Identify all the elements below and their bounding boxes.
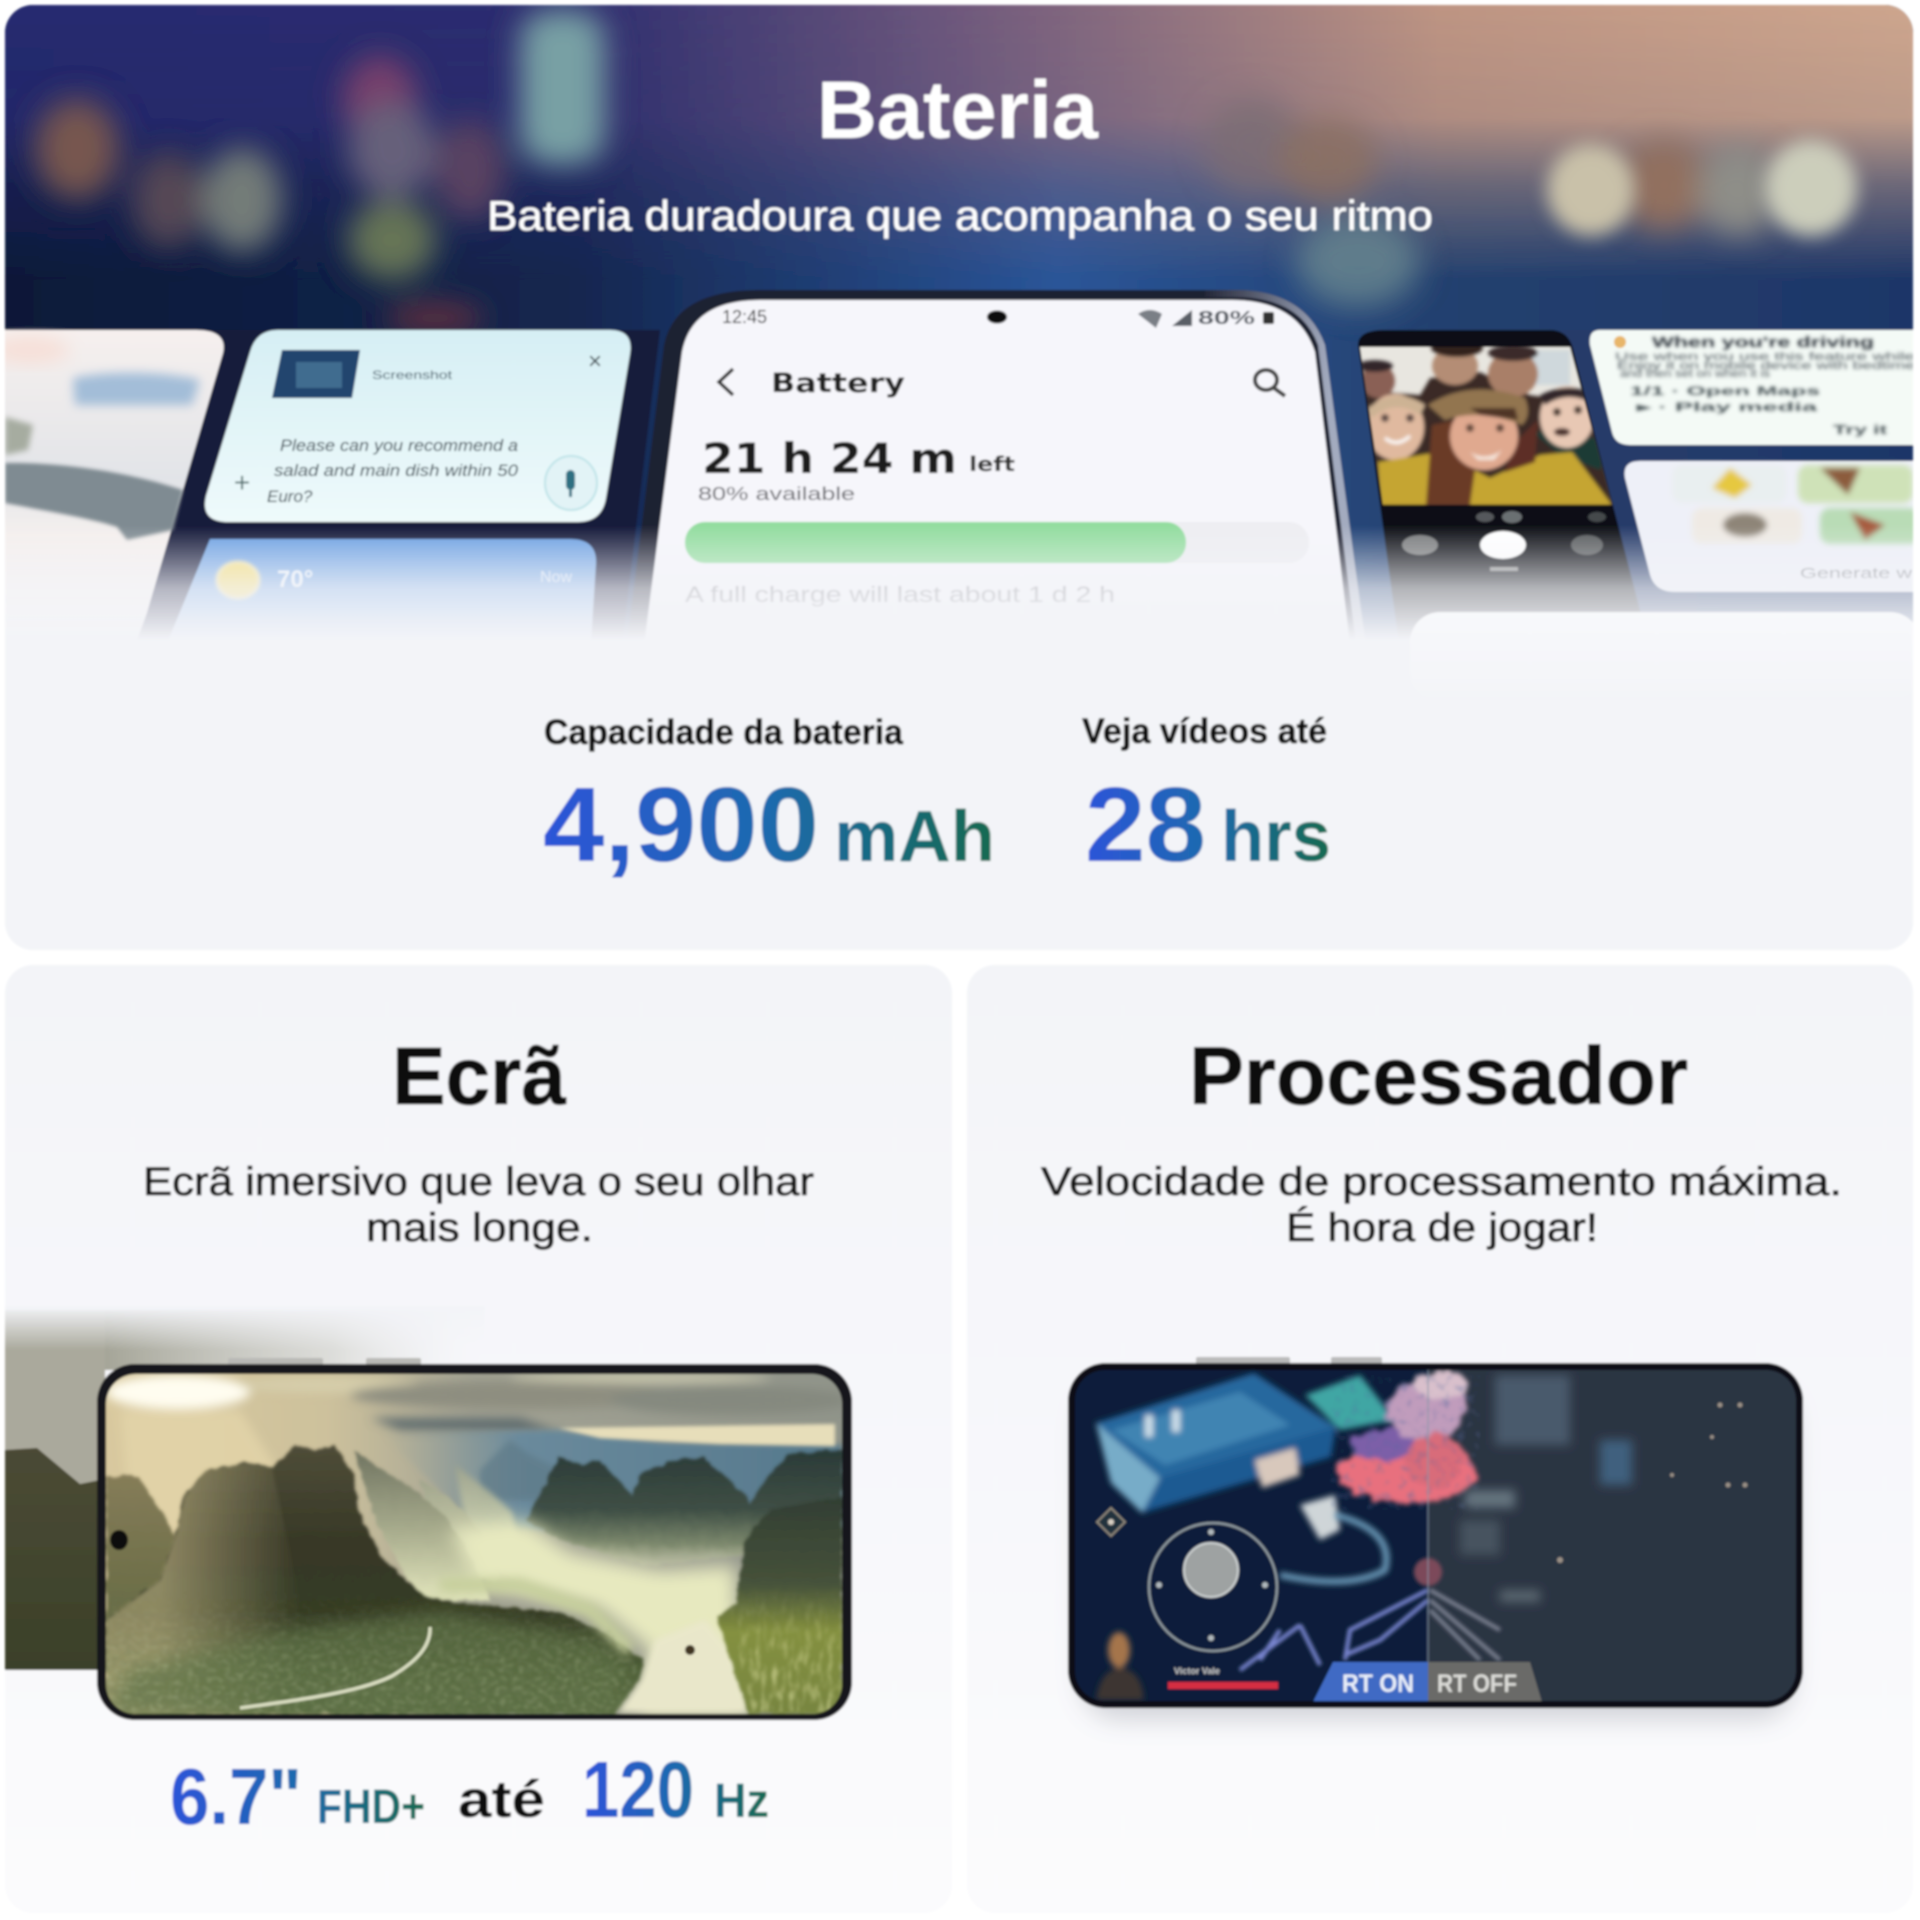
description <box>1041 1160 1842 1250</box>
fog valley <box>450 1520 750 1714</box>
phone: landscape screen <box>97 1358 852 1720</box>
status bar: 80% <box>1198 308 1255 328</box>
back chevron <box>719 369 733 395</box>
header photo background with bokeh <box>3 3 1915 735</box>
image thumbnails <box>1672 465 1920 544</box>
heading: Ecrã: Ecrã <box>392 1031 566 1122</box>
foliage texture <box>106 1590 640 1712</box>
description: Ecrã imersivo que leva o seu olhar <box>143 1160 814 1204</box>
subtitle: Bateria duradoura que acompanha o seu ritmo <box>487 192 1433 239</box>
description: Velocidade de processamento máxima. <box>1041 1160 1842 1204</box>
heading: Bateria: Bateria <box>817 65 1099 156</box>
description: mais longe. <box>366 1206 593 1250</box>
spec line: 120 <box>582 1745 694 1834</box>
RT ON label <box>1313 1662 1428 1702</box>
landscape image <box>100 1370 850 1720</box>
phone screen: 80% available <box>698 484 855 504</box>
lit ridge rim <box>440 1585 630 1650</box>
panel: display <box>5 965 952 1913</box>
airplane wing <box>5 463 183 540</box>
card: weather: Now <box>540 569 572 586</box>
card: driving tip: 1/1 · Open Maps <box>1630 384 1821 398</box>
spec line: 6.7" <box>170 1752 302 1841</box>
card: assistant prompt: + <box>234 467 250 498</box>
battery heading: Battery <box>771 368 905 399</box>
health bar <box>1168 1666 1278 1689</box>
card: assistant prompt: × <box>588 348 602 375</box>
card: driving tip: Try it <box>1833 422 1888 437</box>
card: driving tip <box>1590 330 1920 445</box>
card: airplane photo <box>0 330 224 660</box>
status bar <box>722 307 1274 328</box>
RT ON structure <box>1096 1373 1395 1540</box>
distant blue mountains <box>380 1430 842 1530</box>
camera hole <box>110 1530 128 1550</box>
left low hill <box>106 1476 178 1714</box>
creature legs <box>1240 1590 1428 1670</box>
thumbnail <box>272 350 360 398</box>
card: generated images <box>1625 461 1920 592</box>
landscape photo behind phone <box>5 1306 485 1670</box>
misty ridges <box>420 1480 500 1580</box>
mic button <box>545 456 597 510</box>
selfie photo <box>1355 339 1617 510</box>
card: weather <box>174 537 598 632</box>
card: driving tip: Use when you use this feature while <box>1615 351 1915 363</box>
stat: battery capacity <box>543 713 995 884</box>
main phone <box>625 290 1368 660</box>
faint far ridge <box>455 1465 520 1550</box>
card: driving tip: and then set on when it is <box>1620 368 1771 380</box>
spec line <box>170 1745 769 1841</box>
panel: processor <box>967 965 1913 1913</box>
right dark mountains <box>526 1450 842 1568</box>
phone screen <box>642 300 1352 660</box>
RT OFF label <box>1428 1662 1542 1702</box>
right hill <box>717 1497 842 1714</box>
description: É hora de jogar! <box>1286 1205 1598 1250</box>
card: assistant prompt: Please can you recommend a <box>280 436 518 455</box>
RT ON label: RT ON <box>1342 1670 1414 1698</box>
card: generated images: Generate w <box>1800 565 1912 582</box>
status bar: 12:45 <box>722 307 767 327</box>
clouds and sun glow <box>106 1373 850 1560</box>
battery level bar <box>685 522 1309 563</box>
heading: Processador: Processador <box>1189 1031 1688 1122</box>
spec line: até <box>458 1771 545 1829</box>
time left: 21 h 24 m <box>702 434 957 483</box>
RT OFF structures <box>1460 1375 1632 1602</box>
phone: game screen <box>1068 1357 1803 1720</box>
spec line: FHD+ <box>317 1781 425 1834</box>
card: assistant prompt: Euro? <box>267 487 313 506</box>
card: driving tip: ▸ · Play media <box>1635 400 1818 414</box>
card: driving tip: When you're driving <box>1652 334 1874 351</box>
stat: video playback: 28 <box>1085 766 1206 884</box>
target icon <box>1097 1508 1125 1536</box>
search icon <box>1255 370 1285 396</box>
neon foliage <box>1337 1371 1477 1503</box>
phone screen: A full charge will last about 1 d 2 h <box>685 582 1115 607</box>
main mountain <box>106 1445 643 1714</box>
card: assistant prompt: salad and main dish within 50 <box>274 461 519 480</box>
selfie phone <box>1355 330 1650 650</box>
health bar: Victor Vale <box>1174 1666 1220 1676</box>
card: assistant prompt: Screenshot <box>372 368 453 382</box>
stat: video playback <box>1082 712 1331 884</box>
card: driving tip: Enjoy it on mobile device with bedtime <box>1617 360 1915 372</box>
RT OFF label: RT OFF <box>1437 1670 1517 1698</box>
stat: video playback: hrs <box>1221 797 1331 877</box>
fade of header into panel <box>0 525 1920 640</box>
description <box>143 1160 814 1250</box>
dark rear phone body <box>176 328 660 590</box>
card: weather: 70° <box>277 566 313 593</box>
stat: battery capacity: Capacidade da bateria <box>544 713 904 752</box>
panel: battery <box>0 0 1920 960</box>
spec line: Hz <box>714 1775 769 1828</box>
character portrait <box>1096 1632 1144 1700</box>
joystick <box>1149 1523 1277 1651</box>
stat: video playback: Veja vídeos até <box>1082 712 1327 751</box>
phone screen: left <box>969 452 1016 476</box>
stat: battery capacity: 4,900 <box>543 766 819 884</box>
river <box>618 1620 748 1712</box>
card: assistant prompt <box>205 330 631 522</box>
camera controls <box>1402 511 1606 571</box>
road <box>240 1627 430 1708</box>
cream cloud band <box>559 1424 835 1446</box>
stat: battery capacity: mAh <box>834 797 995 877</box>
game image <box>1075 1370 1796 1702</box>
